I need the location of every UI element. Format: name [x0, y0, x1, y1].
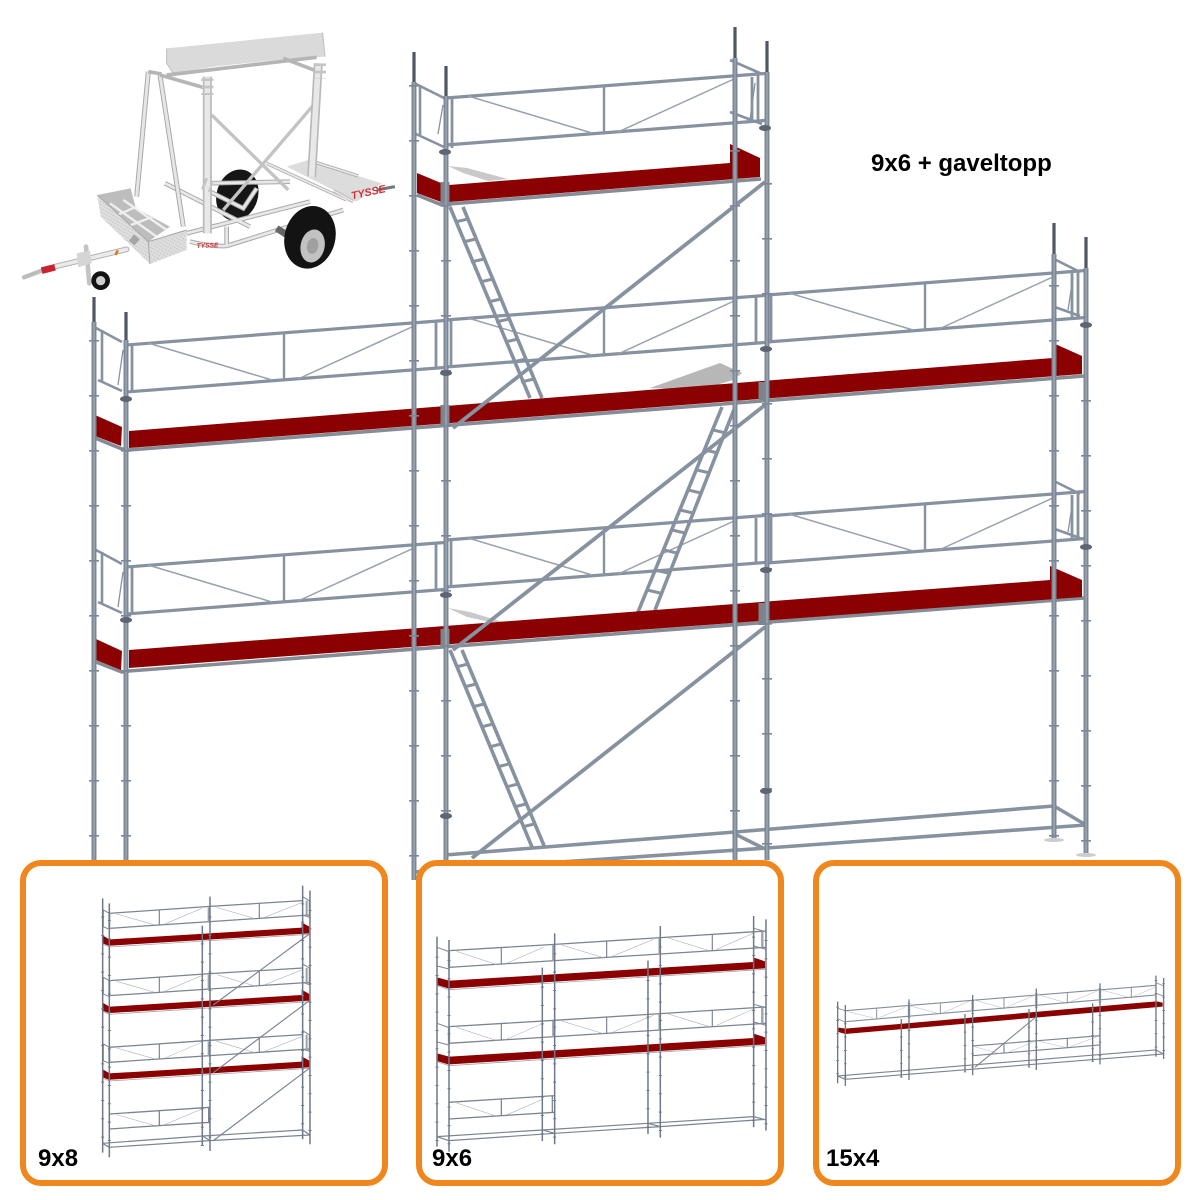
- main scaffold: 9x6 + gaveltopp: [94, 27, 1096, 890]
- guard rails lower level: [96, 480, 1087, 614]
- panel: 9x6: [419, 863, 781, 1183]
- hatch plates: [448, 166, 742, 622]
- label 9x8: 9x8: [38, 1145, 78, 1172]
- label 15x4: 15x4: [826, 1145, 880, 1172]
- trailer toolbox: [97, 188, 187, 264]
- label 9x6: 9x6: [432, 1145, 472, 1172]
- trailer logo front: TYSSE: [196, 242, 219, 250]
- panel: 15x4: [816, 863, 1178, 1183]
- trailer uprights: [137, 57, 320, 233]
- guard rails upper level: [96, 258, 1087, 392]
- panel: 9x8: [23, 863, 385, 1183]
- trailer main wheel: [277, 200, 343, 274]
- trailer chassis: [165, 182, 343, 247]
- deck shadow strips: [95, 179, 1084, 672]
- trailer rear deck: [267, 160, 395, 202]
- title label: 9x6 + gaveltopp: [871, 150, 1052, 177]
- trailer spare wheel: [210, 164, 265, 226]
- trailer bracing: [212, 103, 315, 210]
- diagonal braces: [453, 182, 765, 858]
- scaffold model 15x4: [838, 976, 1164, 1086]
- trailer drawbar: [24, 247, 127, 288]
- trailer logo rear: TYSSE: [350, 183, 388, 202]
- guard rails upper tower: [416, 60, 766, 148]
- scaffold model 9x6: [437, 916, 766, 1152]
- icon: aluminium scaffold trailer: [24, 33, 395, 288]
- platforms: red decks: [95, 144, 1084, 672]
- standards: vertical posts: [94, 27, 1092, 890]
- ladders: [450, 207, 735, 848]
- scaffold model 9x8: [103, 886, 310, 1157]
- base frame: [414, 806, 1096, 872]
- trailer top panel: [167, 33, 325, 73]
